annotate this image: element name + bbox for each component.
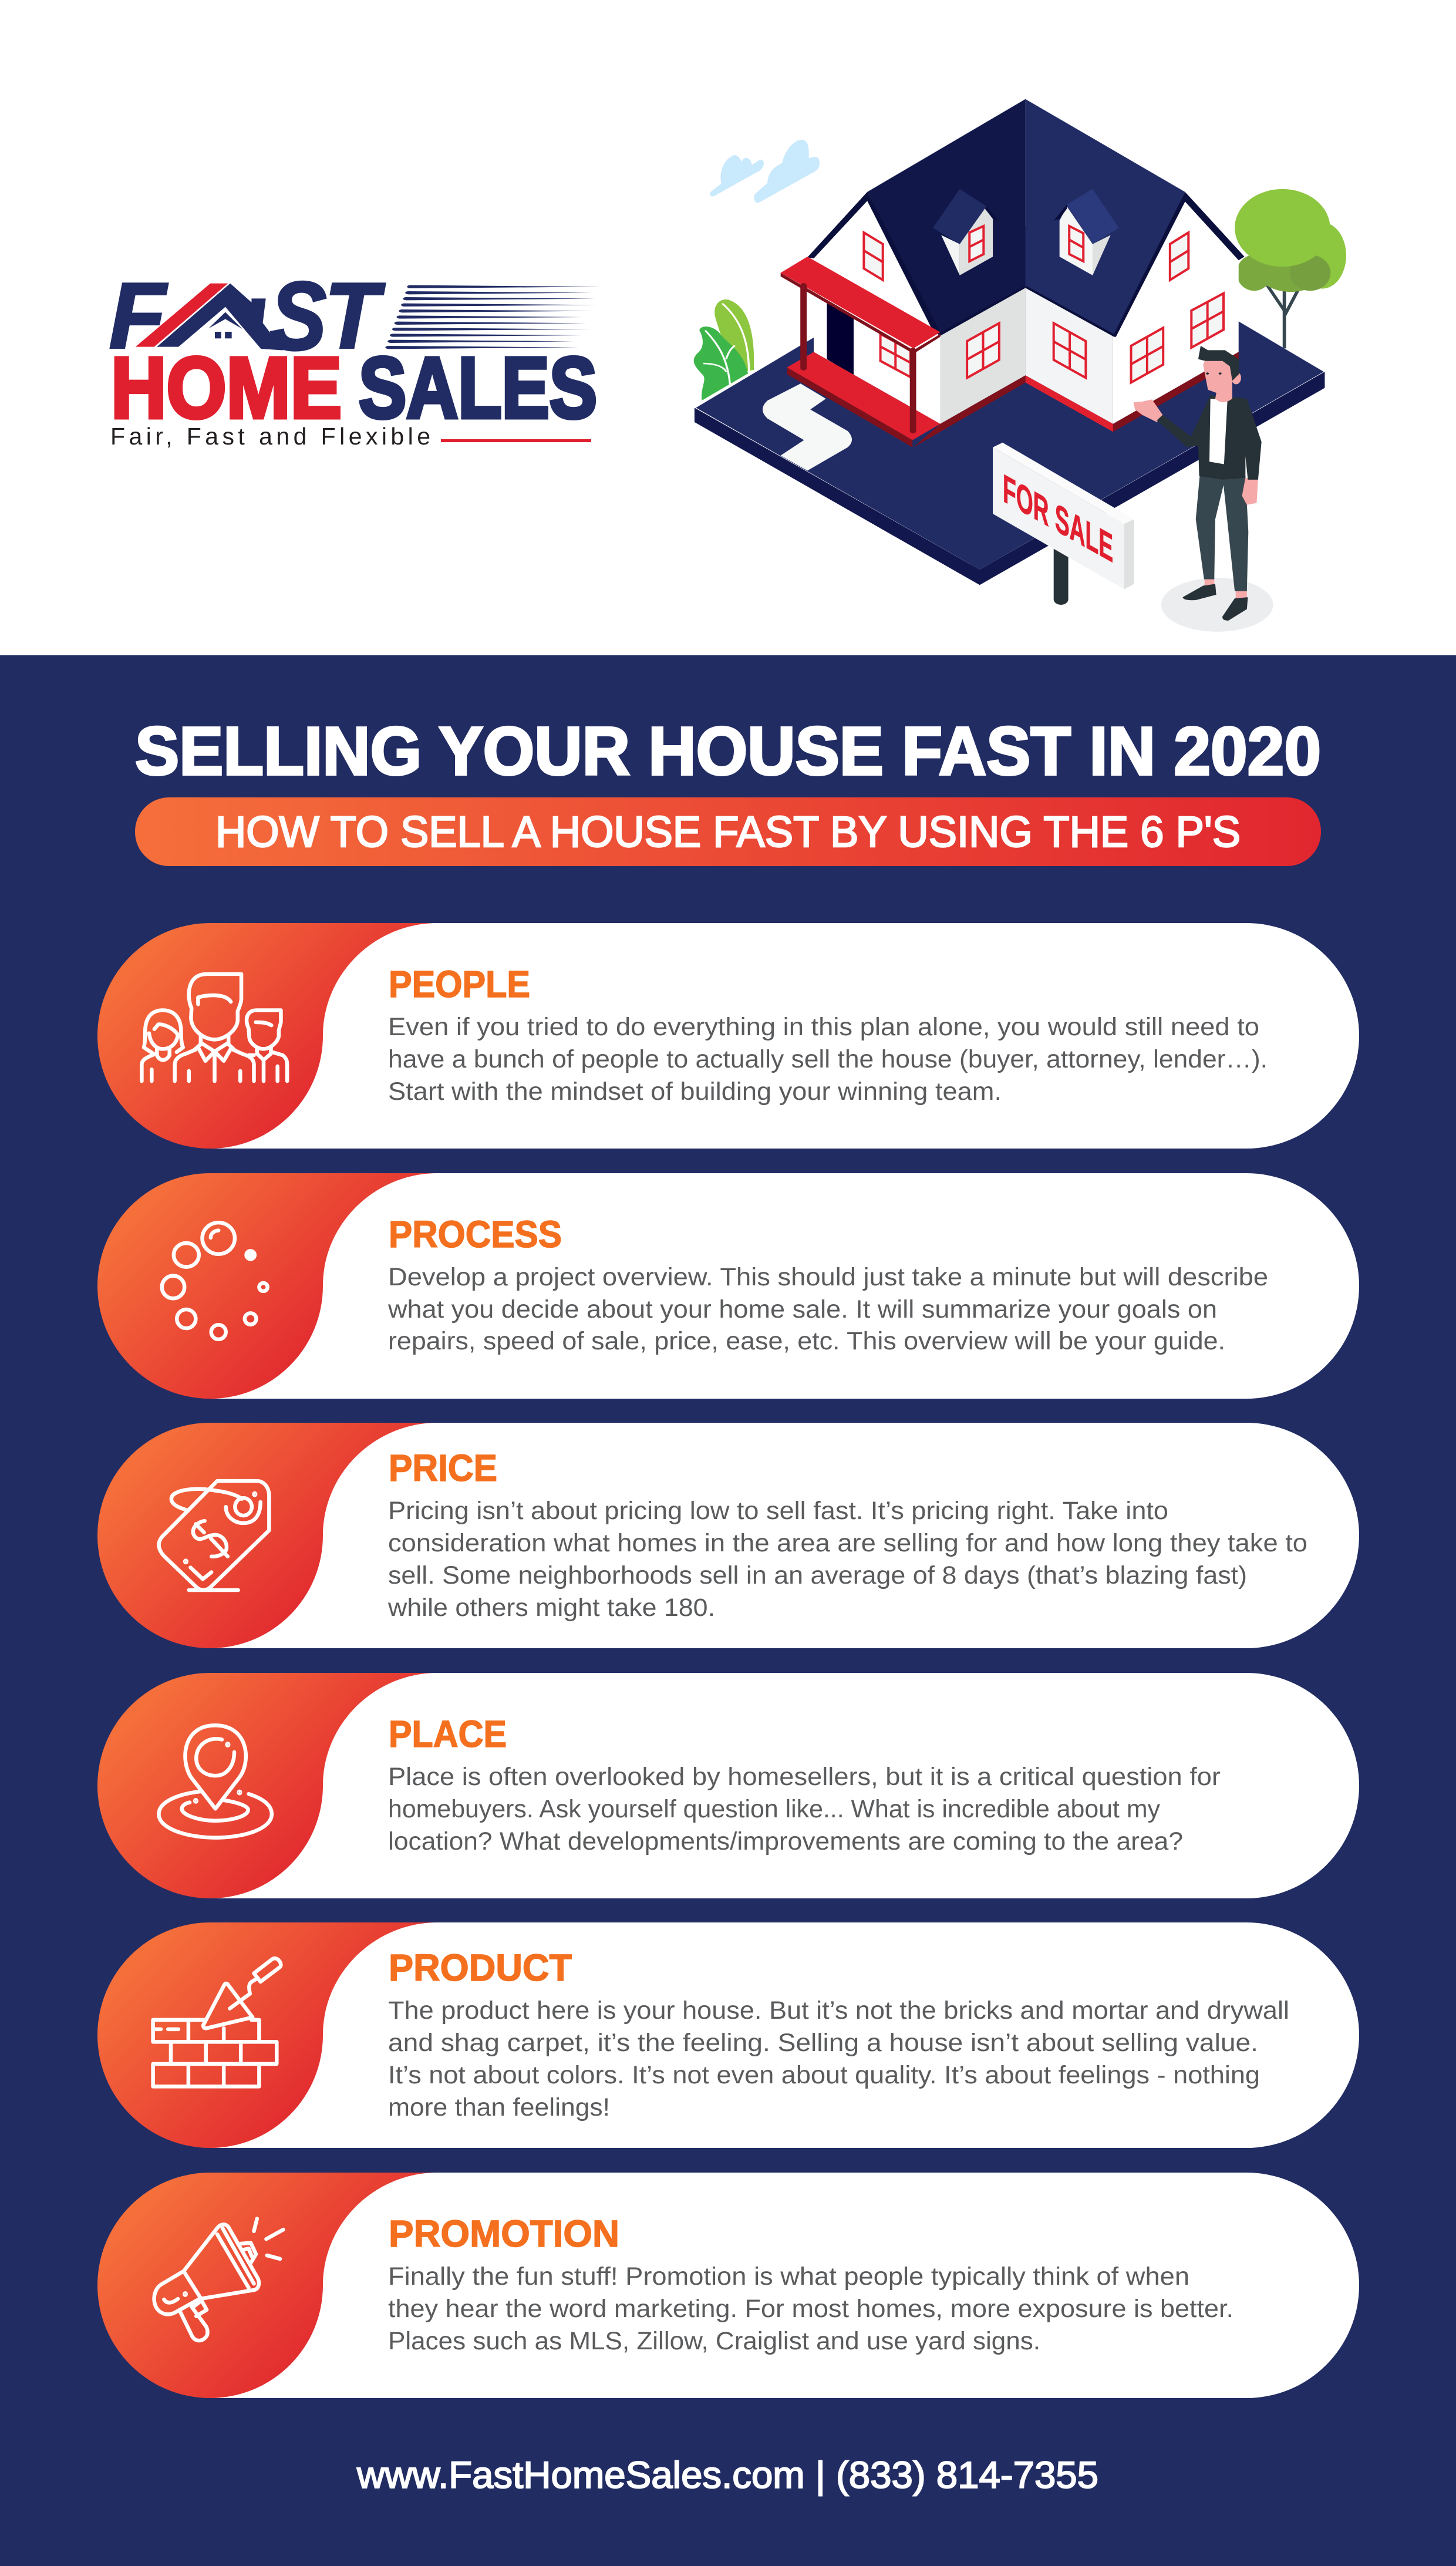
- logo word FAST: T: [325, 264, 385, 368]
- text: price: while others might take 180.: [387, 1594, 715, 1622]
- logo word FAST: F: [109, 264, 167, 368]
- text: people: have a bunch of people to actually sell the house (buyer, attorney, lender…).: [388, 1045, 1268, 1073]
- text: people: [388, 1013, 1268, 1106]
- logo: Fast Home Sales: [109, 262, 602, 450]
- icon: plants: [694, 299, 754, 400]
- dormer right: [1060, 206, 1093, 275]
- text: place: location? What developments/improvements are coming to the area?: [388, 1827, 1183, 1856]
- icon: tree: [1235, 189, 1346, 348]
- panel: price: [97, 1423, 1359, 1648]
- text: promotion: [388, 2262, 1233, 2355]
- subtitle banner: [135, 797, 1321, 866]
- logo tagline: Fair, Fast and Flexible: [110, 423, 430, 450]
- logo roof A and speed lines: [136, 284, 602, 351]
- heading: process: PROCESS: [389, 1213, 562, 1255]
- panel: process: [97, 1173, 1359, 1399]
- sign text: FOR SALE: [1003, 466, 1113, 571]
- roof: [867, 99, 1026, 336]
- garden path: [763, 383, 852, 471]
- panel: product: [97, 1922, 1359, 2148]
- heading: place: PLACE: [389, 1713, 507, 1755]
- illustration: isometric house with agent and for sale sign: [694, 99, 1346, 632]
- house windows: [864, 226, 1224, 382]
- text: process: what you decide about your home sale. It will summarize your goals on: [387, 1295, 1217, 1324]
- text: product: [388, 1996, 1289, 2122]
- text: product: more than feelings!: [388, 2093, 610, 2122]
- text: promotion: Places such as MLS, Zillow, Craiglist and use yard signs.: [388, 2327, 1040, 2355]
- icon: bricks and trowel: [153, 1958, 281, 2086]
- icon: clouds: [710, 140, 820, 203]
- dormer left: [941, 235, 960, 275]
- text: place: homebuyers. Ask yourself question like... What is incredible about my: [388, 1795, 1160, 1823]
- icon: location pin: [159, 1725, 272, 1838]
- text: product: and shag carpet, it’s the feeling. Selling a house isn’t about selling value.: [388, 2029, 1258, 2057]
- logo word FAST: S: [270, 262, 326, 370]
- heading: promotion: PROMOTION: [389, 2213, 619, 2255]
- logo red rule: [441, 439, 591, 442]
- text: process: [387, 1263, 1268, 1355]
- for sale sign board: [993, 443, 1134, 600]
- panel: promotion: [97, 2173, 1359, 2398]
- text: process: Develop a project overview. This should just take a minute but will describe: [388, 1263, 1268, 1291]
- logo word SALES: SALES: [359, 340, 597, 436]
- text: price: consideration what homes in the area are selling for and how long they take to: [388, 1529, 1307, 1557]
- text: people: Even if you tried to do everything in this plan alone, you would still need to: [388, 1013, 1259, 1041]
- text: product: The product here is your house. But it’s not the bricks and mortar and drywall: [388, 1996, 1289, 2025]
- text: place: [388, 1763, 1221, 1856]
- title: SELLING YOUR HOUSE FAST IN 2020: [135, 713, 1321, 789]
- navy background band: [0, 655, 1456, 2566]
- logo word HOME: HOME: [111, 340, 342, 436]
- heading: people: PEOPLE: [389, 963, 530, 1005]
- text: promotion: they hear the word marketing. For most homes, more exposure is better.: [388, 2295, 1233, 2323]
- ground plate: [695, 226, 1324, 585]
- heading: price: PRICE: [389, 1447, 497, 1489]
- text: promotion: Finally the fun stuff! Promotion is what people typically think of when: [388, 2262, 1189, 2291]
- house walls: [814, 201, 941, 424]
- porch: [915, 334, 941, 424]
- text: people: Start with the mindset of building your winning team.: [388, 1077, 1002, 1106]
- house: [781, 99, 1245, 447]
- heading: product: PRODUCT: [389, 1947, 572, 1989]
- text: place: Place is often overlooked by homesellers, but it is a critical question for: [388, 1763, 1221, 1791]
- icon: price tag: [159, 1481, 269, 1590]
- subtitle text: HOW TO SELL A HOUSE FAST BY USING THE 6 P'S: [215, 807, 1241, 856]
- text: price: sell. Some neighborhoods sell in an average of 8 days (that’s blazing fast): [388, 1561, 1247, 1590]
- panel: place: [97, 1673, 1359, 1898]
- panel: people: [97, 923, 1359, 1149]
- text: price: [387, 1497, 1307, 1622]
- icon: people: [141, 974, 287, 1081]
- text: price: Pricing isn’t about pricing low to sell fast. It’s pricing right. Take into: [388, 1497, 1168, 1525]
- agent figure: [1134, 346, 1273, 632]
- logo word FAST: [109, 262, 385, 370]
- icon: megaphone: [154, 2218, 283, 2341]
- icon: process circles: [162, 1223, 268, 1339]
- text: process: repairs, speed of sale, price, ease, etc. This overview will be your guide.: [388, 1327, 1225, 1355]
- text: product: It’s not about colors. It’s not even about quality. It’s about feelings - nothing: [388, 2061, 1260, 2089]
- footer contact line: www.FastHomeSales.com | (833) 814-7355: [356, 2454, 1098, 2496]
